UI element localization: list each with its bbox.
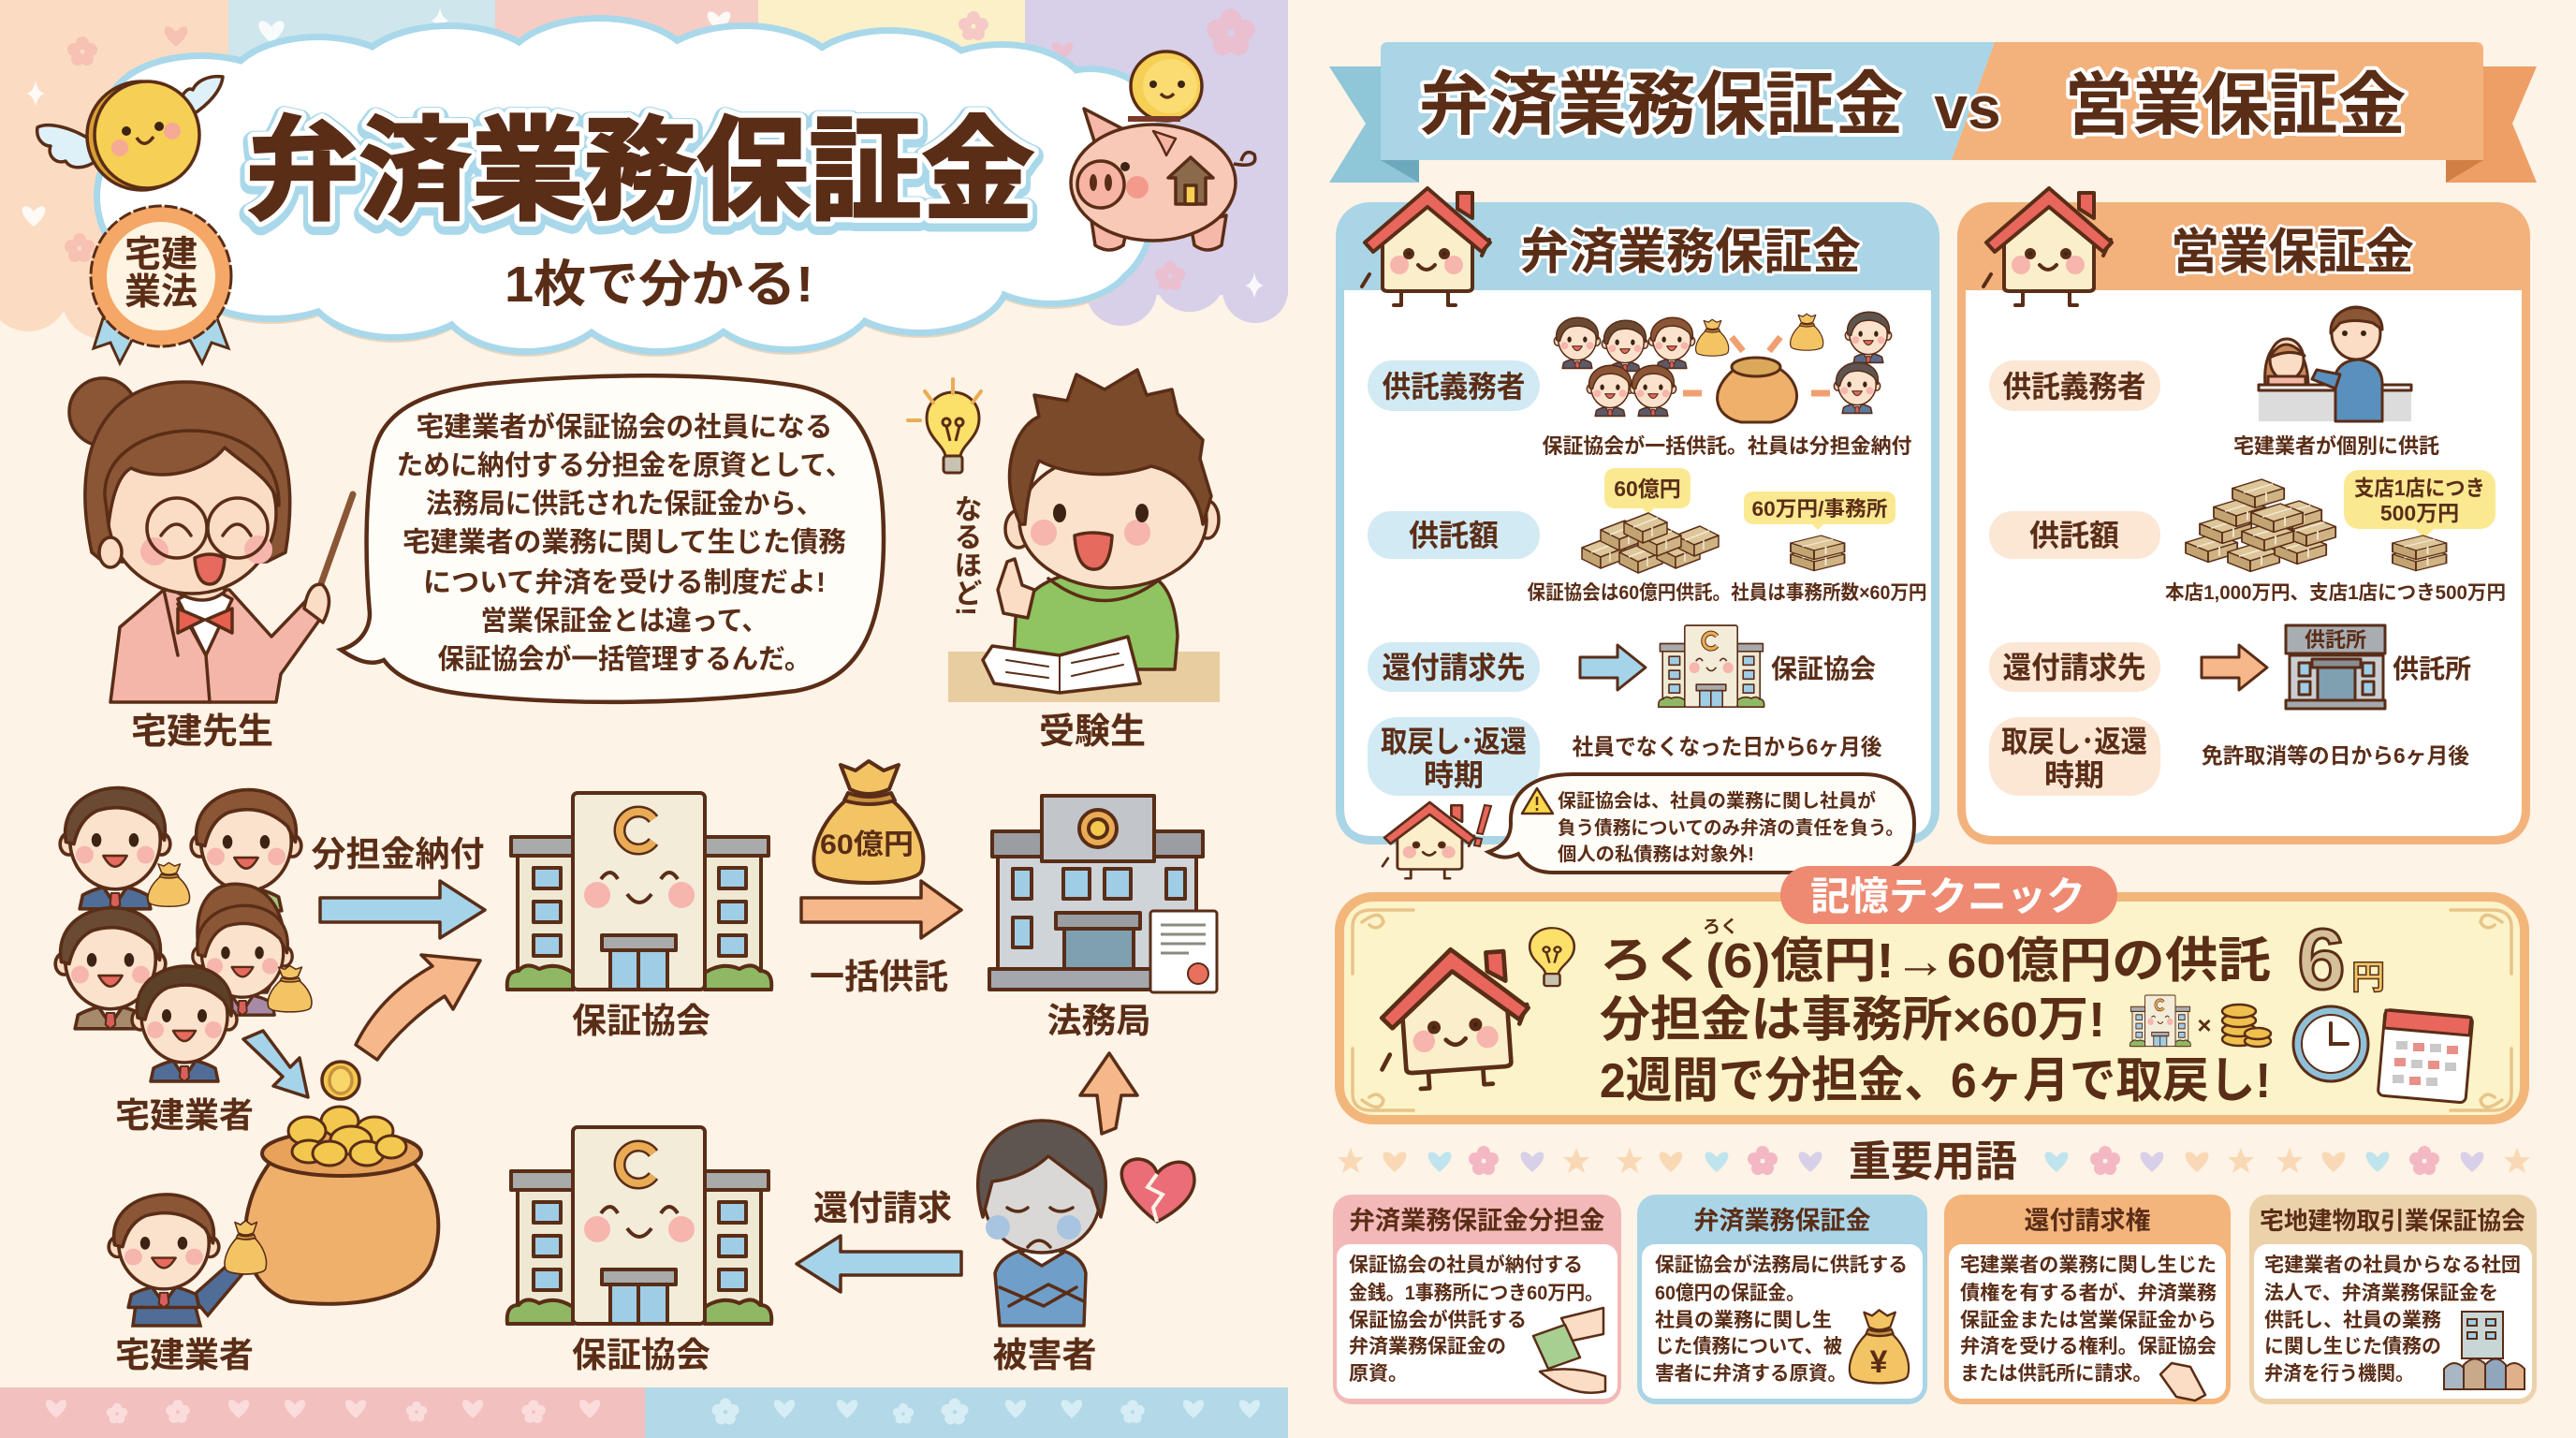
banner: vs heading: 営業保証金 [2065,67,2406,143]
pill: 取戻し・返還時期 right: 時期 [2044,758,2104,792]
speech bubble: 法務局に供託された保証金から、 [426,489,823,520]
pill: 取戻し・返還時期: 取戻し･返還 [1381,725,1527,758]
pill: 供託義務者 [1368,360,1540,411]
memo line 1: ろく(6)億円!→60億円の供託 [1600,934,2271,989]
card: 弁済業務保証金: じた債務について、被 [1655,1336,1842,1357]
icon: 保証協会 building top [507,793,771,990]
card: 宅地建物取引業保証協会 [2249,1195,2537,1404]
caption: row 1 right: 宅建業者が個別に供託 [2233,434,2439,458]
panel heading left: 弁済業務保証金 [1520,226,1861,280]
title: 弁済業務保証金 [246,109,1034,234]
mascot: small house [1383,802,1475,878]
icon: winged coin [37,77,223,190]
group: 宅建業者 [55,788,312,1081]
title cloud [100,22,1156,357]
callout: 支店1店につき [2344,470,2496,538]
illustration: counter scene [2259,307,2411,421]
speech bubble: について弁済を受ける制度だよ! [423,567,826,598]
heading: 重要用語: 重要用語 [1849,1137,2017,1185]
pill: 供託額 right: 供託額 [2029,519,2119,552]
icon: calendar [2378,1009,2473,1103]
label: 法務局: 法務局 [1046,1002,1151,1040]
speech bubble: 営業保証金とは違って、 [481,606,768,637]
card: 弁済業務保証金: 弁済業務保証金 [1694,1207,1870,1235]
badge: 宅建業法 [91,206,231,363]
banner: vs heading: 弁済業務保証金 [1419,66,1904,143]
icon: exclamation [1474,805,1491,846]
arrow: orange to bureau [801,881,961,938]
label: 受験生: 受験生 [1039,712,1146,752]
icon: 6 yen: 6 [2297,912,2346,1007]
card: 還付請求権 [1944,1195,2231,1404]
label: 還付請求: 還付請求 [813,1189,952,1227]
arrow: left to association [797,1236,961,1292]
callout: warning: 個人の私債務は対象外! [1558,843,1754,865]
panel heading right: 営業保証金 [2171,226,2414,280]
card: 還付請求権: または供託所に請求。 [1960,1363,2152,1385]
card: 弁済業務保証金分担金: 原資。 [1349,1363,1408,1385]
callout: 60万円/事務所 [1744,492,1895,530]
character: 被害者 [978,1121,1105,1326]
panel: 営業保証金 [1957,202,2530,844]
icon: 60億円 bag: 60億円 [820,829,914,860]
text: multiply: × [2197,1011,2212,1039]
header pastel band [0,0,1288,339]
callout: 60万円/事務所: 60万円/事務所 [1752,497,1887,521]
mascot: house right [1983,188,2112,305]
mascot: house left [1362,188,1490,305]
speech bubble: 宅建業者の業務に関して生じた債務 [402,527,846,558]
label: なるほど!: なるほど! [949,494,981,616]
card: 宅地建物取引業保証協会: 法人で、弁済業務保証金を [2264,1283,2498,1304]
icon: 供託所 building: 供託所 [2305,628,2366,652]
pill: 取戻し・返還時期 right [1989,717,2160,796]
arrow: orange curved [356,955,480,1060]
badge: 宅建業法: 業法 [124,272,198,313]
panel heading right: 営業保証金 [2171,226,2414,280]
card: 弁済業務保証金分担金: 弁済業務保証金分担金 [1350,1207,1604,1235]
speech bubble: 宅建業者が保証協会の社員になる [416,411,833,443]
footer band [0,1387,1288,1438]
icon: hands and cash [1533,1308,1605,1393]
pill: 取戻し・返還時期 right: 取戻し･返還 [2001,725,2147,758]
icon: 60億円 bag [813,761,923,883]
text: row 4: 社員でなくなった日から6ヶ月後 [1573,735,1881,760]
icon: falling coin [322,1062,359,1099]
icon: yen bag: ¥ [1870,1344,1888,1380]
callout: 60億円: 60億円 [1614,477,1681,501]
character: 宅建先生 [69,378,353,702]
pill: 供託義務者 right [1989,360,2160,411]
pill: 供託義務者 right: 供託義務者 [2003,370,2145,404]
ruby: ろく [1703,917,1738,937]
pill: 還付請求先 right [1989,642,2160,692]
icon: certificate [1150,911,1217,992]
arrow: row 3 left [1580,645,1646,690]
pill: 供託額: 供託額 [1409,519,1499,552]
card: 弁済業務保証金 [1637,1195,1927,1404]
label: 保証協会 top: 保証協会 [572,1002,710,1040]
banner: vs heading: 営業保証金 [2065,67,2406,143]
panel heading left: 弁済業務保証金 [1520,226,1861,280]
icon: coins [2222,1005,2271,1047]
pill: 取戻し・返還時期: 時期 [1424,758,1484,792]
icon: warning triangle [1522,788,1553,814]
icon: clock [2293,1006,2368,1081]
card: 弁済業務保証金: 保証協会が法務局に供託する [1655,1254,1908,1276]
icon: money small left [1791,536,1844,571]
banner: vs heading [1329,42,2537,183]
label: 宅建業者 top: 宅建業者 [115,1096,254,1135]
callout: warning: 保証協会は、社員の業務に関し社員が [1558,789,1876,812]
card: 還付請求権: 弁済を受ける権利。保証協会 [1960,1336,2217,1357]
card: 宅地建物取引業保証協会: 宅建業者の社員からなる社団 [2264,1255,2521,1276]
speech bubble [341,375,884,702]
card: 弁済業務保証金分担金: 保証協会の社員が納付する [1349,1254,1583,1276]
pill: 供託額 [1368,511,1540,559]
memo line 3: 2週間で分担金、6ヶ月で取戻し! [1600,1054,2271,1108]
icon: mini building [2130,995,2190,1047]
icon: piggy bank [1071,51,1255,250]
card: 還付請求権: 宅建業者の業務に関し生じた [1960,1255,2217,1276]
icon: coin pot [245,1107,438,1304]
card: 弁済業務保証金: 害者に弁済する原資。 [1655,1363,1847,1385]
heading pill: 記憶テクニック [1810,874,2086,918]
icon: building and people [2444,1312,2525,1389]
pill: 還付請求先 right: 還付請求先 [2003,651,2145,684]
character: 受験生 [948,370,1220,702]
banner: vs heading: 弁済業務保証金 [1419,66,1904,143]
card: 弁済業務保証金: 社員の業務に関し生 [1655,1310,1832,1331]
card: 還付請求権: 債権を有する者が、弁済業務 [1960,1282,2217,1304]
label: 宅建先生: 宅建先生 [131,712,273,752]
callout: 60億円 [1604,468,1690,515]
subtitle: 1枚で分かる! [505,257,813,313]
panel: 弁済業務保証金 [1336,202,1939,844]
icon: 供託所 building [2286,625,2385,709]
icon: 法務局 building [989,796,1203,990]
callout: warning: 負う債務についてのみ弁済の責任を負う。 [1558,816,1904,839]
card: 還付請求権: 還付請求権 [2024,1207,2151,1235]
caption: row 2: 保証協会は60億円供託。社員は事務所数×60万円 [1528,581,1926,604]
pill: 供託義務者: 供託義務者 [1382,370,1526,404]
card: 弁済業務保証金分担金 [1333,1195,1621,1404]
icon: money pile 60億円 [1582,513,1719,573]
speech bubble: 保証協会が一括管理するんだ。 [438,643,811,675]
pill: 供託額 right [1989,511,2160,559]
callout: warning [1488,774,1914,873]
memo line 2: 分担金は事務所×60万! [1600,993,2105,1048]
callout: 支店1店につき: 500万円 [2380,501,2459,525]
panel: 記憶テクニック [1339,866,2525,1120]
arrow: blue to association [320,881,485,938]
card: 弁済業務保証金分担金: 弁済業務保証金の [1349,1336,1506,1357]
label: 被害者: 被害者 [992,1336,1097,1374]
arrow: blue to pot [243,1031,308,1097]
title: 弁済業務保証金 [246,112,1034,238]
heading pill [1780,866,2117,924]
label: 保証協会 row 3: 保証協会 [1771,654,1876,683]
card: 弁済業務保証金分担金: 金銭。1事務所につき60万円。 [1349,1282,1603,1304]
card: 弁済業務保証金分担金: 保証協会が供託する [1349,1309,1527,1331]
caption: row 1: 保証協会が一括供託。社員は分担金納付 [1543,434,1911,458]
pill: 還付請求先: 還付請求先 [1382,651,1526,684]
banner: vs heading: vs [1934,74,2001,141]
icon: raised hand [2160,1363,2205,1401]
arrow: up to bureau [1080,1053,1137,1134]
arrow: row 3 right [2202,645,2267,690]
icon: money small right [2393,536,2447,571]
card: 還付請求権: 保証金または営業保証金から [1960,1310,2217,1331]
icon: money pile 営業 [2186,479,2335,571]
decoration row [1338,1146,2530,1175]
icon: broken heart [1121,1159,1194,1222]
label: 保証協会 bottom: 保証協会 [572,1336,710,1374]
icon: 6 yen [2297,912,2385,1007]
icon: yen bag [1850,1310,1909,1383]
card: 宅地建物取引業保証協会: 供託し、社員の業務 [2264,1310,2441,1331]
label: 宅建業者 bottom: 宅建業者 [115,1336,254,1374]
card: 宅地建物取引業保証協会: に関し生じた債務の [2264,1336,2441,1357]
badge: 宅建業法: 宅建 [124,235,198,275]
person: 宅建業者 with bag [109,1195,267,1326]
callout: 支店1店につき: 支店1店につき [2354,476,2485,500]
caption: row 2 right: 本店1,000万円、支店1店につき500万円 [2165,582,2506,604]
card: 弁済業務保証金: 60億円の保証金。 [1655,1283,1805,1304]
icon: 6 yen: 円 [2351,958,2385,996]
illustration: 社員 and pot [1554,312,1892,422]
speech bubble: ために納付する分担金を原資として、 [397,450,852,481]
pill: 還付請求先 [1368,642,1540,692]
label: 供託所: 供託所 [2393,654,2471,683]
pill: 取戻し・返還時期 [1368,717,1540,796]
text: row 4 right: 免許取消等の日から6ヶ月後 [2202,743,2469,768]
icon: small association building [1659,625,1764,707]
card: 宅地建物取引業保証協会: 弁済を行う機関。 [2264,1363,2414,1385]
icon: 保証協会 building bottom [507,1127,771,1324]
banner: vs heading: vs [1934,74,2001,141]
label: 一括供託: 一括供託 [810,958,948,996]
card: 宅地建物取引業保証協会: 宅地建物取引業保証協会 [2260,1207,2525,1235]
label: 分担金納付: 分担金納付 [311,835,485,873]
icon: memo bulb [1530,928,1574,986]
mascot: memo house [1374,945,1533,1092]
title: 弁済業務保証金 [246,109,1034,234]
icon: idea bulb [908,379,981,473]
